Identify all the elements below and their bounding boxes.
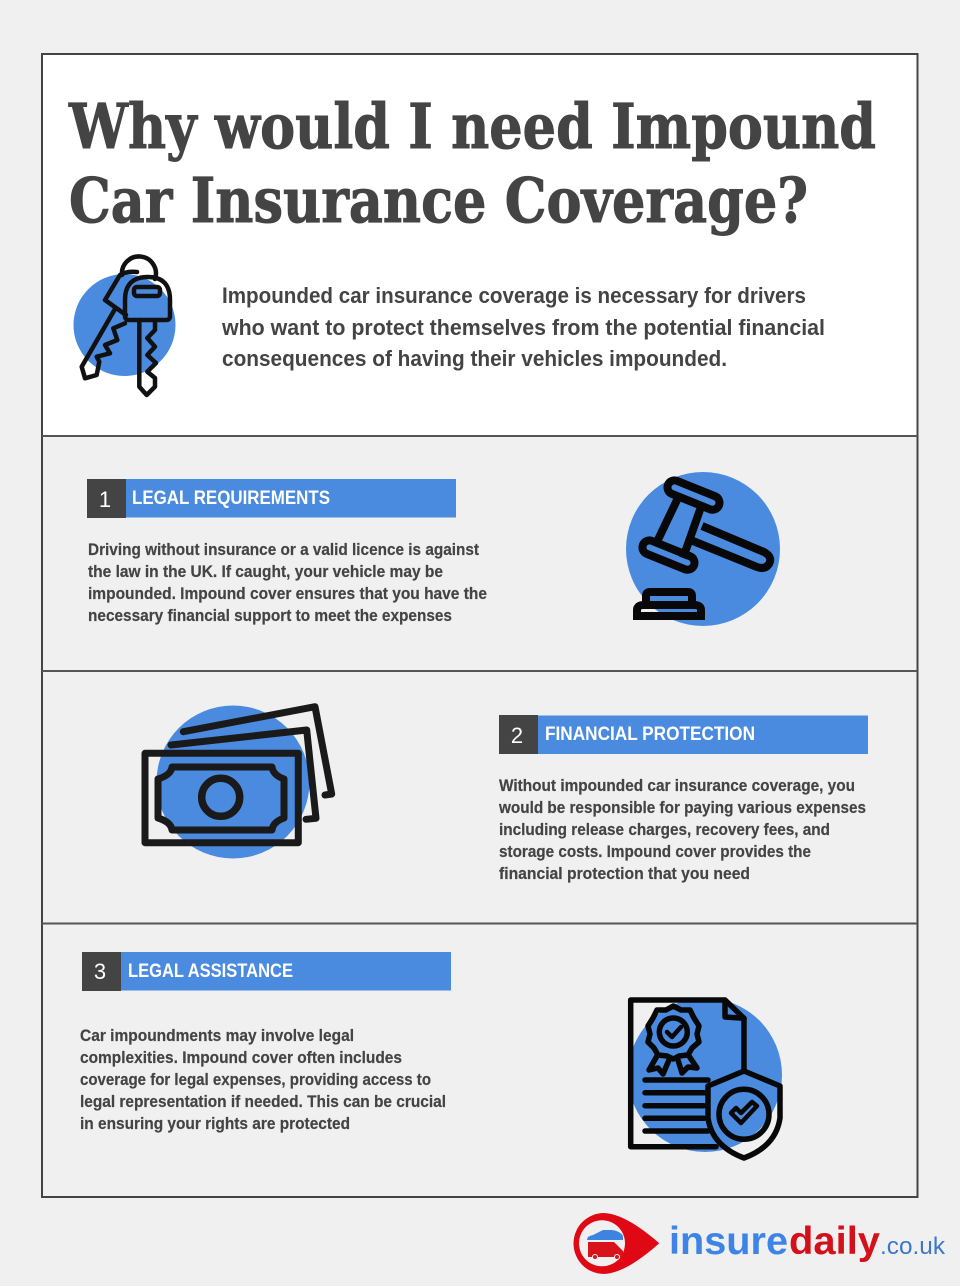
- heading: financial protection: [499, 715, 868, 754]
- intro text: Impounded car insurance coverage is necessary for drivers: [222, 283, 806, 308]
- panel: legal assistance: [80, 952, 782, 1158]
- text block: legal assistance: legal representation if needed. This can be crucial: [80, 1093, 446, 1111]
- text block: legal requirements: Driving without insurance or a valid licence is against: [88, 541, 479, 559]
- wordmark: daily: [789, 1220, 880, 1263]
- heading: financial protection: FINANCIAL PROTECTION: [545, 724, 755, 745]
- text block: legal assistance: Car impoundments may involve legal: [80, 1027, 354, 1045]
- heading: legal requirements: 1: [99, 487, 111, 512]
- heading: legal assistance: LEGAL ASSISTANCE: [128, 961, 293, 982]
- heading: legal requirements: LEGAL REQUIREMENTS: [132, 488, 330, 509]
- logo: insuredaily.co.uk: [574, 1213, 946, 1274]
- wordmark: [669, 1220, 946, 1263]
- heading: financial protection: 2: [511, 723, 523, 748]
- heading: legal assistance: [82, 952, 451, 991]
- icon: certificate and shield: [628, 998, 782, 1158]
- text block: financial protection: including release charges, recovery fees, and: [499, 821, 830, 839]
- icon: gavel: [626, 472, 780, 626]
- title: Car Insurance Coverage?: [69, 164, 808, 237]
- intro text: who want to protect themselves from the potential financial: [221, 315, 825, 340]
- heading: legal assistance: 3: [94, 959, 106, 984]
- text block: legal requirements: [88, 541, 487, 625]
- icon: logo pin: [574, 1213, 659, 1274]
- panel: introduction: [42, 54, 918, 436]
- intro text: [221, 283, 825, 371]
- text block: legal requirements: necessary financial support to meet the expenses: [88, 607, 452, 625]
- wordmark: .co.uk: [880, 1233, 946, 1260]
- icon: car keys: [74, 256, 176, 395]
- text block: financial protection: Without impounded car insurance coverage, you: [499, 777, 855, 795]
- intro text: consequences of having their vehicles impounded.: [222, 346, 727, 371]
- text block: legal requirements: impounded. Impound cover ensures that you have the: [88, 585, 487, 603]
- panel: financial protection: [145, 706, 868, 883]
- heading: legal requirements: [87, 479, 456, 518]
- text block: financial protection: financial protection that you need: [499, 865, 750, 883]
- text block: financial protection: [498, 777, 866, 883]
- text block: legal assistance: [80, 1027, 446, 1133]
- text block: financial protection: storage costs. Impound cover provides the: [499, 843, 811, 861]
- text block: financial protection: would be responsible for paying various expenses: [498, 799, 866, 817]
- icon: banknotes: [145, 706, 332, 858]
- text block: legal assistance: coverage for legal expenses, providing access to: [80, 1071, 431, 1089]
- text block: legal assistance: complexities. Impound cover often includes: [80, 1049, 402, 1067]
- text block: legal assistance: in ensuring your rights are protected: [80, 1115, 350, 1133]
- panel: legal requirements: [87, 472, 780, 626]
- wordmark: insure: [669, 1220, 788, 1263]
- title: [68, 90, 876, 237]
- text block: legal requirements: the law in the UK. If caught, your vehicle may be: [88, 563, 443, 581]
